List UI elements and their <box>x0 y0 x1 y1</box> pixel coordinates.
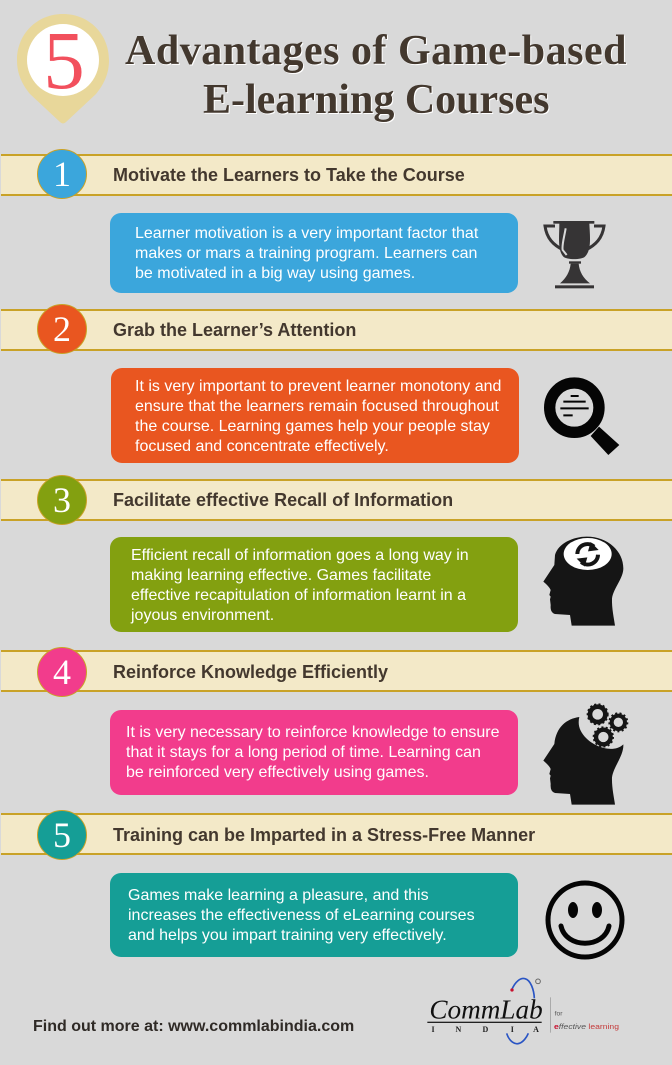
icon: head with refresh arrows <box>543 536 624 626</box>
heading 2: Grab the Learner’s Attention <box>113 320 356 340</box>
title <box>125 28 627 123</box>
text panel 5: increases the effectiveness of eLearning courses <box>128 907 475 924</box>
number 2: 2 <box>53 309 71 349</box>
text panel 4: that it stays for a long period of time. Learning can <box>126 744 481 761</box>
logo: CommLab India: I <box>431 1025 435 1034</box>
footer link: Find out more at: www.commlabindia.com <box>33 1018 354 1035</box>
text panel 3: joyous environment. <box>131 607 274 624</box>
text panel 1: be motivated in a big way using games. <box>135 265 415 282</box>
number 4: 4 <box>53 652 71 692</box>
logo: CommLab India: I <box>511 1025 514 1034</box>
text panel 2: the course. Learning games help your people stay <box>135 418 490 435</box>
text panel 2: It is very important to prevent learner monotony and <box>135 378 501 395</box>
logo: CommLab India: A <box>533 1025 539 1034</box>
logo: CommLab India: CommLab <box>429 994 543 1024</box>
number 1 <box>37 149 87 199</box>
icon: head with gears <box>543 703 628 805</box>
text panel 3 <box>110 537 518 632</box>
icon: trophy <box>543 221 606 288</box>
text panel 3: Efficient recall of information goes a long way in <box>131 547 469 564</box>
title badge: pin with number 5 <box>17 14 109 124</box>
text panel 1 <box>110 213 518 293</box>
text panel 1: Learner motivation is a very important factor that <box>135 225 478 242</box>
text panel 4: It is very necessary to reinforce knowledge to ensure <box>126 724 500 741</box>
heading 4: Reinforce Knowledge Efficiently <box>113 662 388 682</box>
heading 1: Motivate the Learners to Take the Course <box>113 165 465 185</box>
text panel 3: making learning effective. Games facilitate <box>131 567 431 584</box>
text panel 4 <box>110 710 518 795</box>
heading 5: Training can be Imparted in a Stress-Free Manner <box>113 825 535 845</box>
title badge: pin with number 5: 5 <box>43 14 85 106</box>
text panel 3: effective recapitulation of information learnt in a <box>131 587 466 604</box>
number 3 <box>37 475 87 525</box>
text panel 4: be reinforced very effectively using games. <box>126 764 429 781</box>
number 5 <box>37 810 87 860</box>
heading 3: Facilitate effective Recall of Information <box>113 490 453 510</box>
text panel 2 <box>111 368 519 463</box>
number 5: 5 <box>53 815 71 855</box>
logo: CommLab India: N <box>455 1025 461 1034</box>
section 4 band <box>1 650 672 692</box>
number 2 <box>37 304 87 354</box>
section 3 band <box>1 479 672 521</box>
text panel 1: makes or mars a training program. Learners can <box>135 245 477 262</box>
section 1 band <box>1 154 672 196</box>
text panel 5: Games make learning a pleasure, and this <box>128 887 429 904</box>
number 4 <box>37 647 87 697</box>
text panel 5: and helps you impart training very effectively. <box>128 927 447 944</box>
icon: magnifying glass <box>544 377 620 455</box>
section 5 band <box>1 813 672 855</box>
logo: CommLab India <box>427 978 619 1045</box>
logo: CommLab India: D <box>482 1025 488 1034</box>
number 3: 3 <box>53 480 71 520</box>
text panel 2: focused and concentrate effectively. <box>135 438 389 455</box>
title: E-learning Courses <box>203 77 550 123</box>
icon: smiley <box>546 880 624 960</box>
text panel 5 <box>110 873 518 957</box>
title: Advantages of Game-based <box>125 28 627 74</box>
number 1: 1 <box>53 154 71 194</box>
logo: CommLab India: for <box>555 1010 563 1017</box>
text panel 2: ensure that the learners remain focused throughout <box>135 398 499 415</box>
section 2 band <box>1 309 672 351</box>
logo: CommLab India: effective learning <box>554 1022 619 1031</box>
